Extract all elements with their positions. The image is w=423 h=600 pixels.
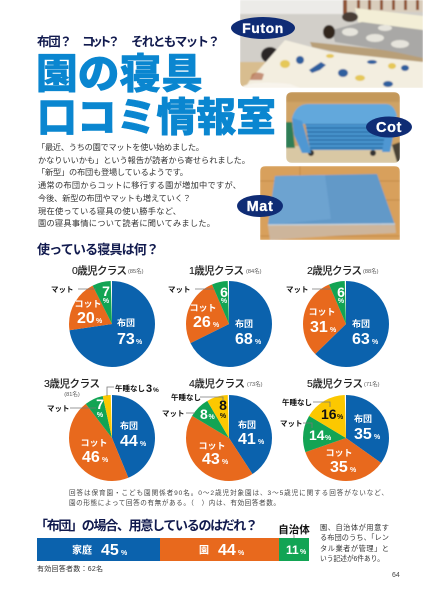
pie: age 5: 16 bbox=[321, 406, 337, 422]
pie: age 2: % bbox=[330, 327, 337, 334]
pie: age 0: % bbox=[136, 339, 143, 346]
pie: age 3: 44 bbox=[120, 433, 138, 450]
kicker heading bbox=[37, 34, 220, 49]
stacked bar: % bbox=[121, 550, 128, 557]
pie: age 1: コット bbox=[189, 303, 217, 313]
section heading: who prepares futon: 「布団」の場合、用意しているのはだれ？ bbox=[35, 518, 258, 533]
pie: age 3: % bbox=[153, 387, 159, 394]
main title: 園の寝具 bbox=[36, 51, 203, 97]
pie: age 4: 41 bbox=[238, 431, 256, 448]
stacked bar: 44 bbox=[218, 542, 236, 559]
pie: age 4: 午睡なし bbox=[171, 392, 201, 402]
pie: age 5: 午睡なし bbox=[282, 397, 312, 407]
pie: age 3: (81名) bbox=[64, 390, 80, 398]
pie: age 5: % bbox=[374, 434, 381, 441]
pie: age 3 bbox=[44, 377, 159, 466]
photo: cot bbox=[286, 92, 412, 163]
page number: 64 bbox=[392, 572, 400, 579]
pie: age 0: コット bbox=[74, 299, 102, 309]
pie: age 1 bbox=[168, 264, 262, 348]
pie: age 4: % bbox=[208, 414, 216, 421]
pie: age 1: 布団 bbox=[235, 318, 253, 329]
pie: age 5: コット bbox=[325, 448, 353, 458]
pie: age 4: (73名) bbox=[247, 380, 263, 388]
section heading: bedding used: 使っている寝具は何？ bbox=[37, 242, 159, 257]
stacked bar: 11 bbox=[286, 543, 299, 557]
pie: age 1: % bbox=[213, 322, 220, 329]
pie: age 2: 2歳児クラス bbox=[307, 264, 362, 277]
pie: age 5: 14 bbox=[309, 427, 325, 443]
side note bbox=[320, 523, 389, 563]
pie: age 1: % bbox=[255, 339, 262, 346]
pie: age 1: 1歳児クラス bbox=[189, 264, 244, 277]
pie: age 2: 31 bbox=[310, 319, 328, 336]
intro text: 通常の布団からコットに移行する園が増加中ですが、 bbox=[38, 180, 241, 190]
intro text: かなりいいかも」という報告が読者から寄せられました。 bbox=[38, 155, 250, 165]
intro text: 今後、新型の布団やマットも増えていく？ bbox=[38, 193, 191, 203]
pie: age 2: (88名) bbox=[363, 267, 379, 275]
pie: age 1: マット bbox=[168, 285, 190, 294]
kicker heading: コット？ bbox=[82, 35, 120, 49]
pie: age 0: % bbox=[96, 318, 103, 325]
label: Futon: Futon bbox=[242, 20, 284, 36]
main title: 口コミ情報室 bbox=[37, 96, 276, 140]
survey note bbox=[69, 488, 388, 507]
pie: age 2: 6 bbox=[337, 284, 345, 300]
pie: age 2 bbox=[286, 264, 379, 348]
stacked bar: % bbox=[238, 550, 245, 557]
pie: age 0: 7 bbox=[102, 283, 110, 299]
pie: age 0: 0歳児クラス bbox=[72, 264, 127, 277]
pie: age 5: 5歳児クラス bbox=[307, 377, 363, 390]
pie: age 0: 20 bbox=[77, 310, 95, 327]
pie: age 3: % bbox=[102, 457, 109, 464]
pie: age 5: 35 bbox=[354, 426, 372, 443]
pie: age 4: 4歳児クラス bbox=[189, 377, 245, 390]
pie: age 3: 午睡なし bbox=[115, 383, 145, 393]
side note: 園、自治体が用意す bbox=[320, 523, 389, 532]
main title bbox=[36, 51, 276, 140]
stacked bar: 家庭 bbox=[72, 544, 92, 556]
photo: futon bbox=[231, 0, 423, 88]
pie: age 1: 6 bbox=[220, 284, 228, 300]
pie: age 4 bbox=[162, 377, 265, 468]
intro text: 現在使っている寝具の使い勝手など、 bbox=[38, 206, 181, 216]
stacked bar bbox=[37, 523, 310, 561]
pie: age 2: コット bbox=[308, 307, 336, 317]
kicker heading: 布団？ bbox=[37, 34, 72, 49]
pie: age 3: 46 bbox=[82, 449, 100, 466]
label: Futon bbox=[231, 17, 295, 39]
pie: age 1: 26 bbox=[193, 314, 211, 331]
pie: age 4: 8 bbox=[200, 406, 208, 422]
label: Mat bbox=[237, 195, 283, 217]
pie: age 1: (84名) bbox=[246, 267, 262, 275]
stacked bar: 45 bbox=[101, 542, 119, 559]
side note: タル業者が管理」と bbox=[320, 544, 389, 553]
pie: age 5 bbox=[280, 377, 381, 476]
label: Cot: Cot bbox=[376, 120, 402, 136]
pie: age 3: % bbox=[97, 412, 104, 419]
pie: age 3: マット bbox=[47, 404, 70, 413]
pie: age 0: 布団 bbox=[117, 317, 135, 328]
pie: age 0 bbox=[51, 264, 144, 348]
pie: age 5: 35 bbox=[330, 459, 348, 476]
stacked bar: 自治体 bbox=[278, 523, 310, 536]
intro text bbox=[37, 142, 250, 228]
pie: age 0: % bbox=[103, 298, 110, 305]
pie: age 2: % bbox=[372, 339, 379, 346]
pie: age 3: 布団 bbox=[120, 420, 138, 431]
kicker heading: それともマット？ bbox=[131, 35, 220, 49]
pie: age 3: % bbox=[140, 441, 147, 448]
pie: age 0: 73 bbox=[117, 331, 135, 348]
intro text: 「最近、うちの園でマットを使い始めました。 bbox=[37, 142, 204, 152]
photo: mat bbox=[237, 166, 400, 240]
pie: age 4: % bbox=[220, 413, 227, 420]
pie: age 0: マット bbox=[51, 285, 74, 294]
survey note: 回答は保育園・こども園関係者90名。0～2歳児対象園は、3～5歳児に関する回答がないなど、 bbox=[69, 488, 388, 497]
pie: age 2: % bbox=[338, 298, 345, 305]
pie: age 4: 布団 bbox=[238, 419, 256, 430]
intro text: 「新型」の布団も登場しているようです。 bbox=[37, 167, 188, 177]
pie: age 5: (71名) bbox=[364, 380, 380, 388]
stacked bar: 園 bbox=[199, 544, 209, 556]
pie: age 3: 3歳児クラス bbox=[44, 377, 100, 390]
pie: age 3: 3 bbox=[146, 383, 152, 395]
pie: age 2: マット bbox=[286, 285, 308, 294]
pie: age 4: % bbox=[258, 439, 265, 446]
pie: age 5: マット bbox=[280, 419, 302, 428]
pie: age 5: % bbox=[337, 414, 344, 421]
pie: age 3: コット bbox=[80, 438, 108, 448]
pie: age 5: 布団 bbox=[354, 413, 372, 424]
pie: age 4: 43 bbox=[202, 451, 220, 468]
pie: age 5: % bbox=[350, 467, 357, 474]
pie: age 4: マット bbox=[162, 409, 184, 418]
pie: age 3: 7 bbox=[96, 396, 104, 412]
survey note: 園の形態によって回答の有無がある。（ ）内は、有効回答者数。 bbox=[69, 498, 280, 507]
pie: age 2: 布団 bbox=[352, 318, 370, 329]
stacked bar: % bbox=[300, 549, 307, 556]
pie: age 5: % bbox=[325, 435, 332, 442]
intro text: 園の寝具事情について読者に聞いてみました。 bbox=[38, 218, 215, 228]
label: Mat: Mat bbox=[247, 199, 273, 215]
respondents note: 有効回答者数：62名 bbox=[37, 564, 103, 573]
pie: age 4: コット bbox=[198, 441, 226, 451]
pie: age 1: 68 bbox=[235, 331, 253, 348]
pie: age 4: % bbox=[222, 459, 229, 466]
pie: age 0: (85名) bbox=[128, 267, 144, 275]
pie: age 1: % bbox=[221, 298, 228, 305]
side note: いう記述が6件あり。 bbox=[320, 554, 384, 563]
pie: age 4: 8 bbox=[219, 397, 227, 413]
side note: る布団のうち、「レン bbox=[320, 533, 389, 542]
pie: age 2: 63 bbox=[352, 331, 370, 348]
